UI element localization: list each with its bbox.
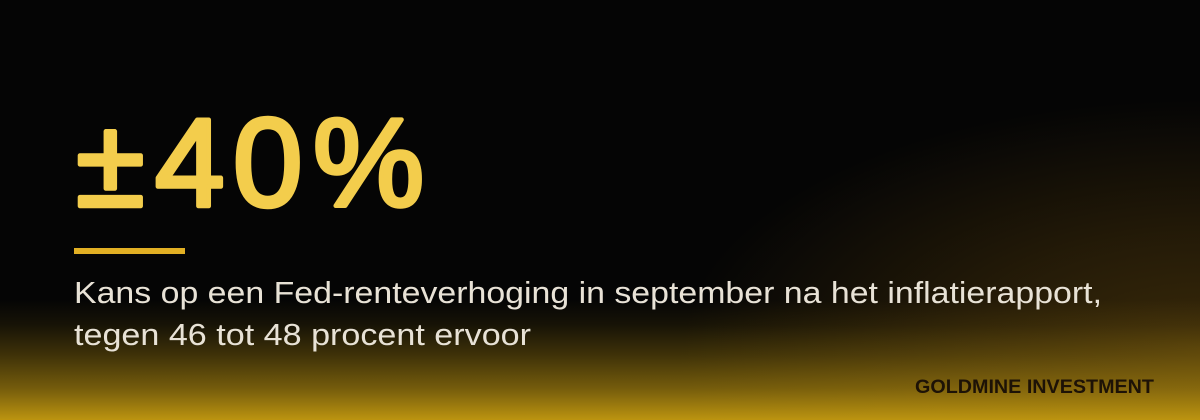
description text: tegen 46 tot 48 procent ervoor [74, 317, 531, 352]
big number: ±40% [76, 94, 424, 233]
description text [74, 275, 1102, 352]
description text: Kans op een Fed-renteverhoging in september na het inflatierapport, [74, 275, 1102, 310]
accent rule [74, 248, 185, 254]
brand label: GOLDMINE INVESTMENT [915, 377, 1154, 398]
